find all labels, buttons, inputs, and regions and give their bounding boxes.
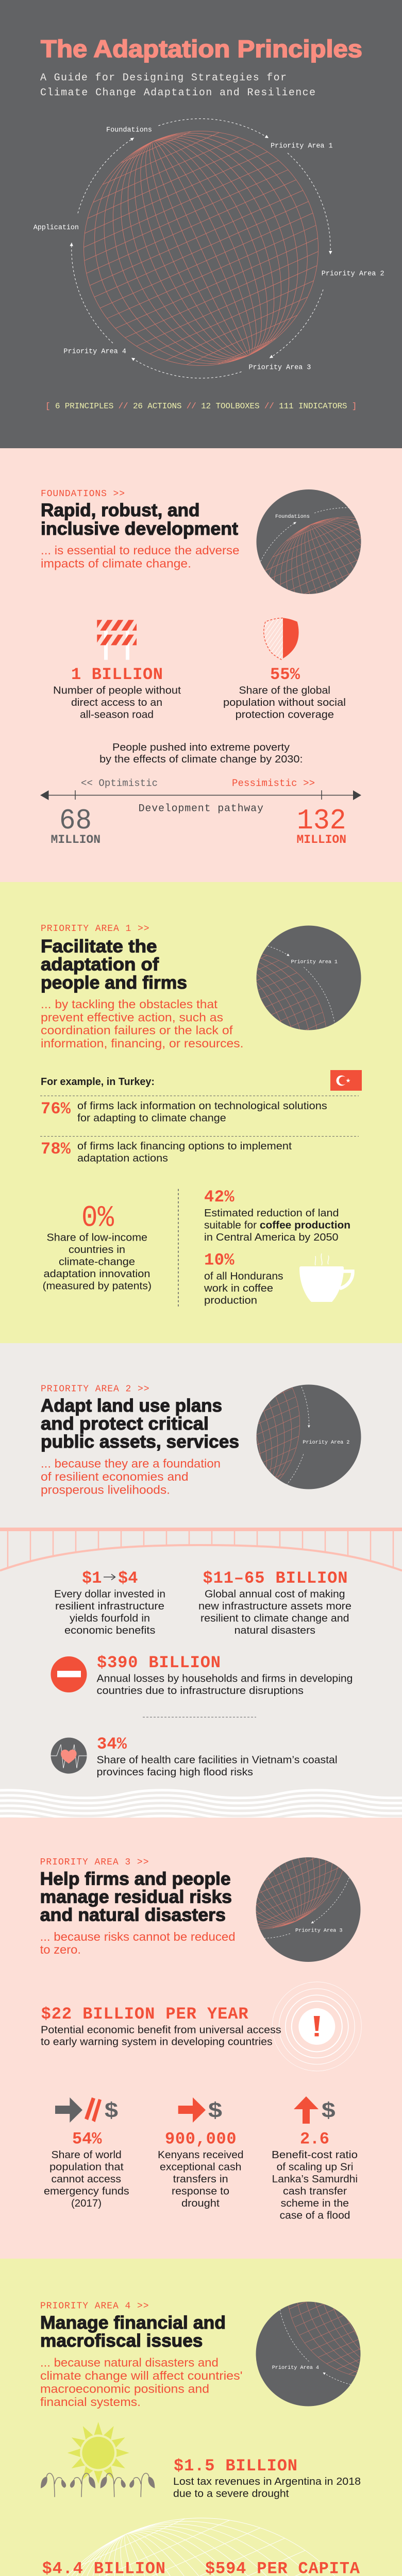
heading: and natural disasters [40, 1905, 226, 1925]
stat: 54%: 54% [72, 2130, 102, 2149]
stat: $1 to $4: yields fourfold in [70, 1613, 150, 1624]
globe crop: priority area 3 [256, 1857, 361, 1962]
chart: development pathway axis: 68 [59, 804, 92, 837]
icon: blocked arrow to dollar: $ [105, 2098, 118, 2122]
stat: $22 billion per year: to early warning system in developing countries [41, 2036, 273, 2047]
tagline: counts: [ 6 PRINCIPLES // 26 ACTIONS // 12 TOOLBOXES // 111 INDICATORS ] [45, 402, 357, 411]
globe crop: priority area 2: Priority Area 2 [303, 1439, 349, 1446]
stat: 34%: Share of health care facilities in Vietnam’s coastal [97, 1754, 338, 1766]
stat: 900,000 [158, 2130, 243, 2209]
stat: 900,000: transfers in [173, 2173, 228, 2185]
stat: 78%: adaptation actions [77, 1153, 168, 1164]
stat: $11-65 billion: natural disasters [234, 1624, 315, 1636]
globe crop: foundations: Foundations [275, 514, 310, 520]
chart: development pathway axis: 132 [297, 804, 346, 837]
subheading [41, 544, 239, 570]
stat: 900,000: Kenyans received [158, 2149, 243, 2161]
heading [41, 937, 187, 993]
stat: 0%: adaptation innovation [43, 1268, 150, 1280]
stat: 78%: 78% [41, 1140, 71, 1159]
stat: 10% [204, 1251, 283, 1307]
stat: 42% [204, 1188, 350, 1243]
stat: $390 billion: countries due to infrastructure disruptions [97, 1685, 304, 1697]
globe crop: foundations [257, 489, 361, 594]
heading: and protect critical [41, 1414, 209, 1434]
stat: 54% [44, 2130, 129, 2209]
subheading: ... because natural disasters and [40, 2355, 219, 2369]
globe labels: Priority Area 4 [63, 348, 126, 355]
subheading: coordination failures or the lack of [41, 1024, 233, 1037]
icon: coffee cup [299, 1253, 353, 1302]
subheading [40, 1930, 236, 1956]
stat: 2.6: scheme in the [281, 2197, 349, 2209]
subheading: prosperous livelihoods. [41, 1483, 170, 1497]
chart: development pathway axis: Pessimistic >> [232, 778, 315, 789]
stat: 54%: Share of world [52, 2149, 122, 2161]
stat: 1 billion: 1 BILLION [71, 665, 163, 684]
icon: road barrier [97, 620, 137, 660]
stat: $22 billion per year: Potential economic benefit from universal access [41, 2024, 281, 2036]
stat: 2.6: Lanka’s Samurdhi [272, 2173, 358, 2185]
icon: half shield [264, 618, 299, 660]
globe diagram [46, 94, 356, 403]
heading [41, 500, 238, 539]
stat: $11-65 billion: Global annual cost of making [205, 1588, 345, 1600]
stat: $1.5 billion: $1.5 BILLION [174, 2456, 297, 2476]
section label: PRIORITY AREA 4 >> [40, 2301, 148, 2311]
panel: header [0, 0, 402, 448]
heading [40, 2313, 226, 2351]
stat: $11-65 billion: resilient to climate change and [200, 1613, 349, 1624]
icon: alarm rings [272, 1982, 361, 2071]
globe labels [34, 127, 384, 371]
globe crop: priority area 3: Priority Area 3 [295, 1928, 342, 1934]
text: poverty intro [99, 741, 303, 765]
stat: $11-65 billion: new infrastructure assets more [198, 1600, 351, 1612]
stat: 10%: work in coffee [204, 1282, 273, 1294]
subheading: ... is essential to reduce the adverse [41, 544, 239, 557]
stat: 54%: cannot access [52, 2173, 121, 2185]
stat: $390 billion [97, 1653, 353, 1697]
stat: 1 billion: direct access to an [71, 697, 162, 708]
stat: 10%: of all Hondurans [204, 1270, 283, 1282]
subheading: ... because risks cannot be reduced [40, 1930, 236, 1943]
stat: $1 to $4: resilient infrastructure [55, 1600, 164, 1612]
stat: 2.6: case of a flood [280, 2209, 350, 2222]
chart: development pathway axis: MILLION [51, 833, 100, 846]
stat: 1 billion [53, 665, 181, 721]
icon: sun and wilted plants [41, 2422, 155, 2497]
stat: $1 to $4 [54, 1569, 165, 1636]
stat: 42%: in Central America by 2050 [204, 1231, 339, 1243]
text: poverty intro: People pushed into extreme poverty [112, 741, 290, 753]
stat: 900,000: response to [172, 2185, 229, 2197]
globe crop: priority area 1 [257, 925, 361, 1030]
icon: arrow to dollar [178, 2097, 222, 2123]
text: poverty intro: by the effects of climate change by 2030: [99, 753, 303, 765]
heading: inclusive development [41, 519, 238, 539]
stat: 54%: emergency funds [44, 2185, 129, 2197]
subheading: impacts of climate change. [41, 556, 191, 570]
text: Turkey intro: For example, in Turkey: [41, 1076, 155, 1088]
stat: 78%: of firms lack financing options to implement [77, 1140, 292, 1152]
stat: 76% [41, 1099, 327, 1124]
section label: PRIORITY AREA 1 >> [41, 924, 149, 934]
stat: 900,000: exceptional cash [160, 2161, 241, 2173]
stat: 2.6 [272, 2130, 358, 2222]
stat: $22 billion per year [41, 2005, 281, 2047]
stat: $11-65 billion: $11–65 BILLION [203, 1569, 347, 1588]
stat: 34%: 34% [97, 1735, 127, 1754]
stat: 0%: countries in [69, 1244, 125, 1256]
globe crop: priority area 4: Priority Area 4 [272, 2365, 319, 2371]
subheading: information, financing, or resources. [41, 1037, 243, 1050]
stat: $22 billion per year: $22 BILLION PER YEAR [41, 2005, 248, 2024]
heading: Facilitate the [41, 937, 157, 956]
subheading: macroeconomic positions and [40, 2382, 209, 2396]
stat: 1 billion: all-season road [80, 709, 154, 721]
subheading [41, 1457, 221, 1497]
stat: 76%: of firms lack information on technological solutions [77, 1100, 327, 1112]
subheading: climate change will affect countries' [40, 2369, 243, 2382]
subheading: of resilient economies and [41, 1470, 189, 1483]
subheading [41, 997, 243, 1050]
stat: $1.5 billion: Lost tax revenues in Argentina in 2018 [173, 2476, 361, 2487]
stat: $1.5 billion [173, 2456, 361, 2500]
chart: development pathway axis [40, 778, 361, 846]
heading: Help firms and people [40, 1869, 231, 1889]
heading: Rapid, robust, and [41, 500, 200, 520]
heading: people and firms [41, 973, 187, 993]
icon: blocked arrow to dollar [55, 2097, 118, 2123]
stat: 10%: production [204, 1295, 257, 1307]
stat: 54%: population that [49, 2161, 124, 2173]
stat: 54%: (2017) [71, 2197, 102, 2209]
stat: 55%: protection coverage [236, 709, 334, 721]
icon: arrow to dollar: $ [208, 2098, 222, 2122]
panel: foundations [0, 448, 402, 882]
stat: $1 to $4: Every dollar invested in [54, 1588, 165, 1600]
stat: 76%: for adapting to climate change [77, 1112, 226, 1124]
stat: 42%: suitable for coffee production [204, 1219, 350, 1231]
stat: $1 to $4: $4 [118, 1569, 138, 1588]
stat: 0% [43, 1202, 152, 1292]
subtitle: Climate Change Adaptation and Resilience [40, 87, 315, 99]
stat: 0%: climate-change [59, 1256, 135, 1268]
stat: $390 billion: $390 BILLION [97, 1653, 221, 1672]
heading: macrofiscal issues [40, 2331, 203, 2351]
globe labels: Application [34, 224, 79, 232]
panel: priority area 3 [0, 1818, 402, 2259]
chart: development pathway axis: MILLION [297, 833, 346, 846]
background globe [67, 2518, 335, 2576]
globe labels: Foundations [106, 127, 152, 134]
stat: $1.5 billion: due to a severe drought [173, 2488, 289, 2500]
stat: 900,000: drought [181, 2197, 220, 2209]
stat: 2.6: 2.6 [300, 2130, 329, 2149]
globe labels: Priority Area 3 [248, 364, 311, 371]
icon: heart monitor [51, 1738, 87, 1774]
subtitle: A Guide for Designing Strategies for [40, 72, 287, 84]
subheading: to zero. [40, 1943, 81, 1956]
stat: 0%: Share of low-income [46, 1232, 147, 1244]
subheading [40, 2355, 243, 2409]
stat: 55%: population without social [223, 697, 346, 708]
illustration: waves [0, 1789, 402, 1818]
stat: $1 to $4: $1 [82, 1569, 102, 1588]
subheading: financial systems. [40, 2395, 141, 2409]
subheading: ... because they are a foundation [41, 1457, 221, 1470]
stat: 10%: 10% [204, 1251, 234, 1270]
globe labels: Priority Area 1 [271, 142, 333, 150]
heading: adaptation of [41, 955, 159, 975]
stat: $1 to $4: economic benefits [64, 1624, 155, 1636]
globe crop: priority area 2 [257, 1385, 361, 1489]
stat: 1 billion: Number of people without [53, 684, 181, 697]
stat: 42%: Estimated reduction of land [204, 1207, 339, 1219]
heading: Adapt land use plans [41, 1396, 222, 1416]
section label: PRIORITY AREA 3 >> [40, 1857, 148, 1868]
stat: 55%: Share of the global [239, 684, 330, 697]
subtitle [40, 72, 315, 99]
stat: 42%: 42% [204, 1188, 234, 1207]
globe crop: priority area 1: Priority Area 1 [291, 959, 338, 965]
chart: development pathway axis: Development pathway [139, 803, 263, 815]
heading [40, 1869, 232, 1925]
section label: PRIORITY AREA 2 >> [41, 1384, 149, 1394]
stat: 0%: (measured by patents) [43, 1280, 152, 1292]
stat: $390 billion: Annual losses by households and firms in developing [97, 1673, 353, 1685]
icon: up arrow to dollar: $ [322, 2098, 336, 2122]
stat: 76%: 76% [41, 1099, 71, 1118]
stat: 55% [223, 665, 346, 721]
title: The Adaptation Principles [41, 35, 362, 62]
illustration: bridge [0, 1528, 402, 1570]
subheading: prevent effective action, such as [41, 1011, 223, 1024]
panel: priority area 2 [0, 1307, 402, 1824]
chart: development pathway axis: << Optimistic [81, 778, 158, 789]
stat: 2.6: of scaling up Sri [277, 2161, 353, 2173]
stat: 55%: 55% [270, 665, 300, 684]
stat: 34%: provinces facing high flood risks [97, 1766, 253, 1778]
heading: public assets, services [41, 1432, 239, 1452]
heading: Manage financial and [40, 2313, 226, 2333]
icon: up arrow to dollar [294, 2096, 336, 2124]
icon: Turkish flag [330, 1070, 362, 1091]
panel: priority area 1 [0, 882, 402, 1343]
stat: $11-65 billion [198, 1569, 351, 1636]
globe labels: Priority Area 2 [322, 270, 384, 278]
heading: manage residual risks [40, 1887, 232, 1907]
section label: FOUNDATIONS >> [41, 489, 125, 499]
globe crop: priority area 4 [256, 2302, 361, 2406]
stat: 78% [41, 1140, 292, 1164]
stat: 2.6: Benefit-cost ratio [272, 2149, 358, 2161]
subheading: ... by tackling the obstacles that [41, 997, 217, 1011]
stat: 34% [97, 1735, 338, 1778]
icon: no entry [51, 1656, 87, 1692]
heading [41, 1396, 239, 1452]
stat: 2.6: cash transfer [283, 2185, 347, 2197]
stat: 0%: 0% [81, 1202, 114, 1235]
panel: priority area 4 [0, 2259, 402, 2576]
stat: 900,000: 900,000 [165, 2130, 237, 2149]
